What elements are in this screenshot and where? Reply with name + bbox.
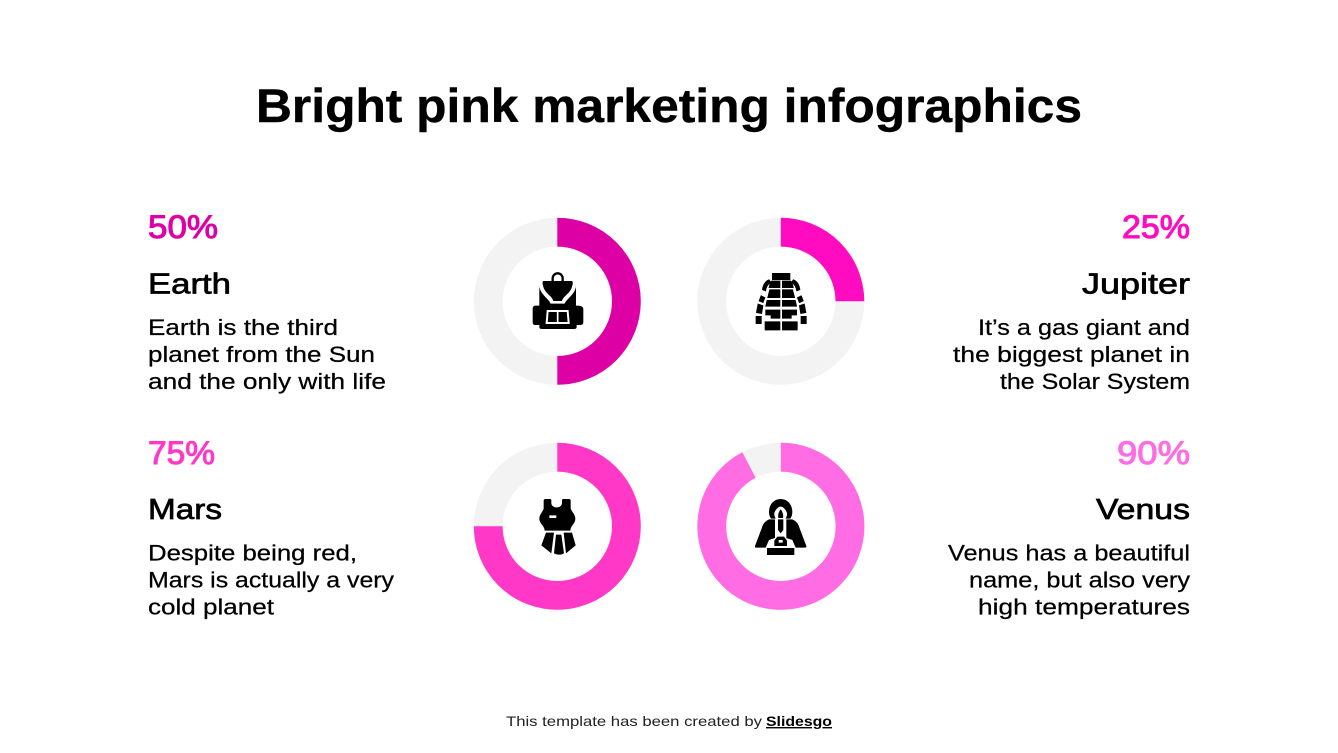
heading: Earth: Earth [148,268,231,300]
description: Mars: cold planet [148,594,274,620]
description: Mars: Despite being red, [148,540,357,566]
panel: Mars text [148,435,394,620]
percentage: Venus: 90% [1117,435,1190,471]
title: Bright pink marketing infographics [256,79,1082,132]
icon: puffer jacket [756,273,806,330]
donut chart: Jupiter 25% [712,232,850,370]
description: Mars: Mars is actually a very [148,568,394,592]
description: Earth: planet from the Sun [148,342,375,367]
description: Earth: Earth is the third [148,315,338,340]
icon: hoodie [755,499,806,555]
panel: Jupiter text [953,209,1190,394]
panel: Earth text [148,209,386,394]
percentage: Earth: 50% [148,209,218,245]
heading: Mars: Mars [148,494,222,526]
percentage: Mars: 75% [148,435,215,471]
percentage: Jupiter: 25% [1122,209,1190,245]
description: Jupiter: the Solar System [1000,369,1190,394]
description: Venus: Venus has a beautiful [948,540,1190,566]
footer credit [506,713,832,729]
icon: dress [539,499,576,555]
heading: Venus: Venus [1096,494,1190,526]
description: Jupiter: It’s a gas giant and [978,315,1190,340]
description: Venus: name, but also very [969,568,1190,592]
description: Venus: high temperatures [978,594,1190,620]
heading: Jupiter: Jupiter [1082,268,1190,300]
description: Earth: and the only with life [148,369,386,394]
footer credit: Slidesgo [766,713,832,729]
description: Jupiter: the biggest planet in [953,342,1190,367]
donut chart: Earth 50% [488,232,626,370]
icon: backpack [533,273,583,329]
panel: Venus text [948,435,1190,620]
donut chart: Venus 90% [712,457,850,595]
footer credit: This template has been created by [506,713,762,729]
donut chart: Mars 75% [488,457,626,595]
